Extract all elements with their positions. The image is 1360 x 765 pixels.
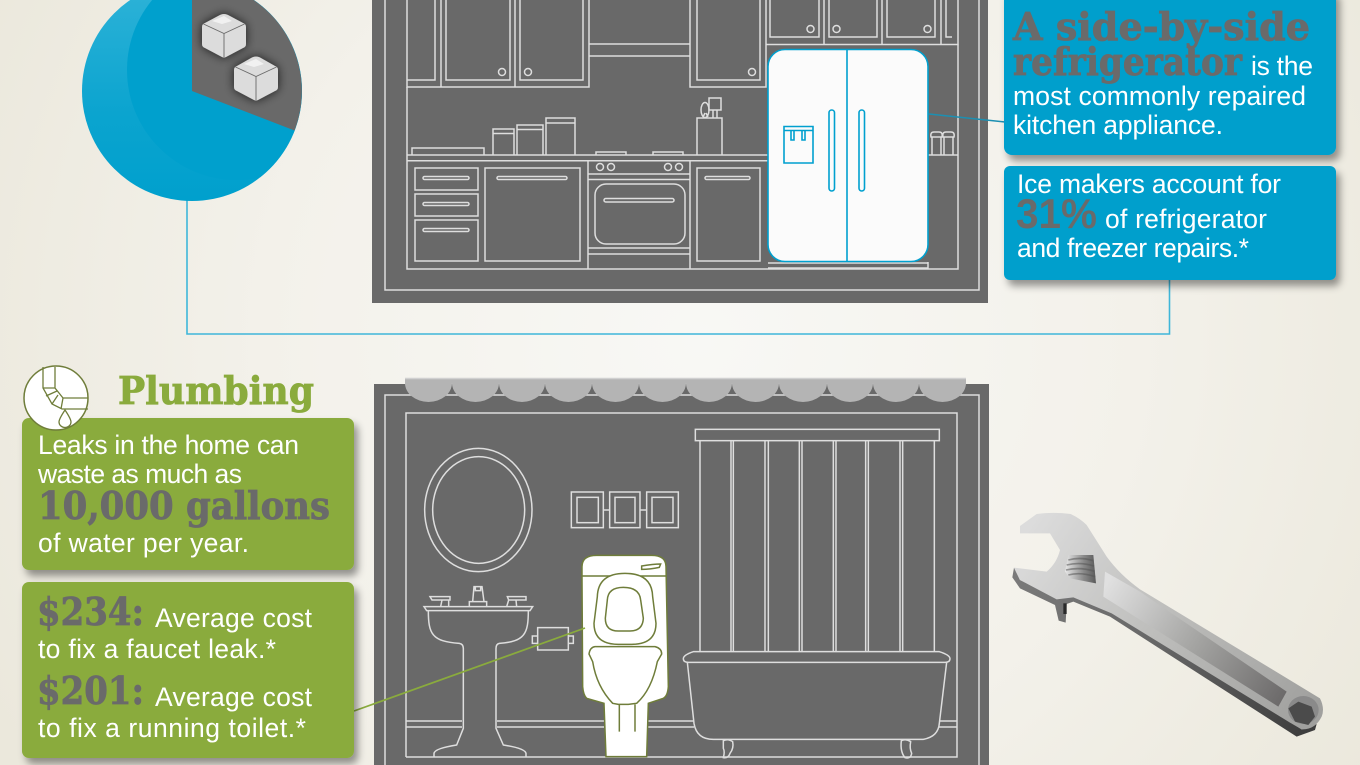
body text: and freezer repairs.* (1017, 233, 1249, 263)
wainscot lines (406, 721, 957, 727)
kitchen frame (385, 0, 979, 290)
lower cabinets (415, 168, 760, 261)
icon: ice cube (234, 56, 278, 100)
panel: kitchen illustration (372, 0, 988, 303)
callout: leaks (22, 418, 354, 570)
pie wedge (192, 0, 302, 130)
headline text: refrigerator (1013, 39, 1243, 84)
body text: is the (1251, 51, 1313, 81)
picture frames (571, 492, 678, 528)
callout: ice makers (1004, 166, 1336, 280)
body text: most commonly repaired (1013, 81, 1306, 111)
callout: average repair costs (22, 582, 354, 758)
sink (424, 587, 533, 757)
body text: to fix a faucet leak.* (38, 634, 276, 664)
headline text: A side-by-side (1012, 4, 1310, 49)
pipe box (532, 628, 573, 650)
connector line: toilet to callout (354, 628, 585, 711)
curtain valance (405, 378, 966, 402)
icon: leaking pipe (24, 366, 88, 430)
bathroom frames (385, 395, 979, 765)
body text: to fix a running toilet.* (38, 713, 306, 743)
refrigerator (768, 50, 928, 262)
callout: side-by-side refrigerator (1004, 0, 1336, 155)
body text: of water per year. (38, 528, 249, 558)
shower curtain (695, 429, 939, 652)
icon: water dispenser (784, 126, 813, 163)
upper cabinets (407, 0, 958, 87)
body text: of refrigerator (1105, 204, 1267, 234)
body text: Leaks in the home can (38, 430, 299, 460)
cost figure: $234: (37, 589, 144, 634)
icon: ice cube (202, 14, 246, 58)
percentage figure: 31% (1016, 190, 1097, 237)
body text: kitchen appliance. (1013, 110, 1223, 140)
cost figure: $201: (37, 668, 144, 713)
heading: Plumbing: Plumbing (118, 368, 314, 413)
body text: Average cost (155, 603, 313, 633)
pie chart: ice maker share (82, 0, 302, 201)
toilet (582, 555, 668, 757)
panel: bathroom illustration (374, 378, 989, 765)
connector line: refrigerator to callout (929, 114, 1005, 122)
oven (588, 160, 690, 269)
connector line: ice makers to pie chart (187, 198, 1170, 334)
icon: adjustable wrench (1012, 513, 1323, 737)
fridge base (768, 262, 928, 269)
counter items (412, 98, 722, 155)
countertop and wall (407, 44, 958, 269)
spice jars (931, 132, 954, 155)
body text: waste as much as (37, 459, 242, 489)
body text: Average cost (155, 682, 313, 712)
body text: Ice makers account for (1017, 169, 1281, 199)
mirror (425, 448, 532, 572)
large figure: 10,000 gallons (38, 483, 330, 528)
bathtub (683, 652, 950, 758)
